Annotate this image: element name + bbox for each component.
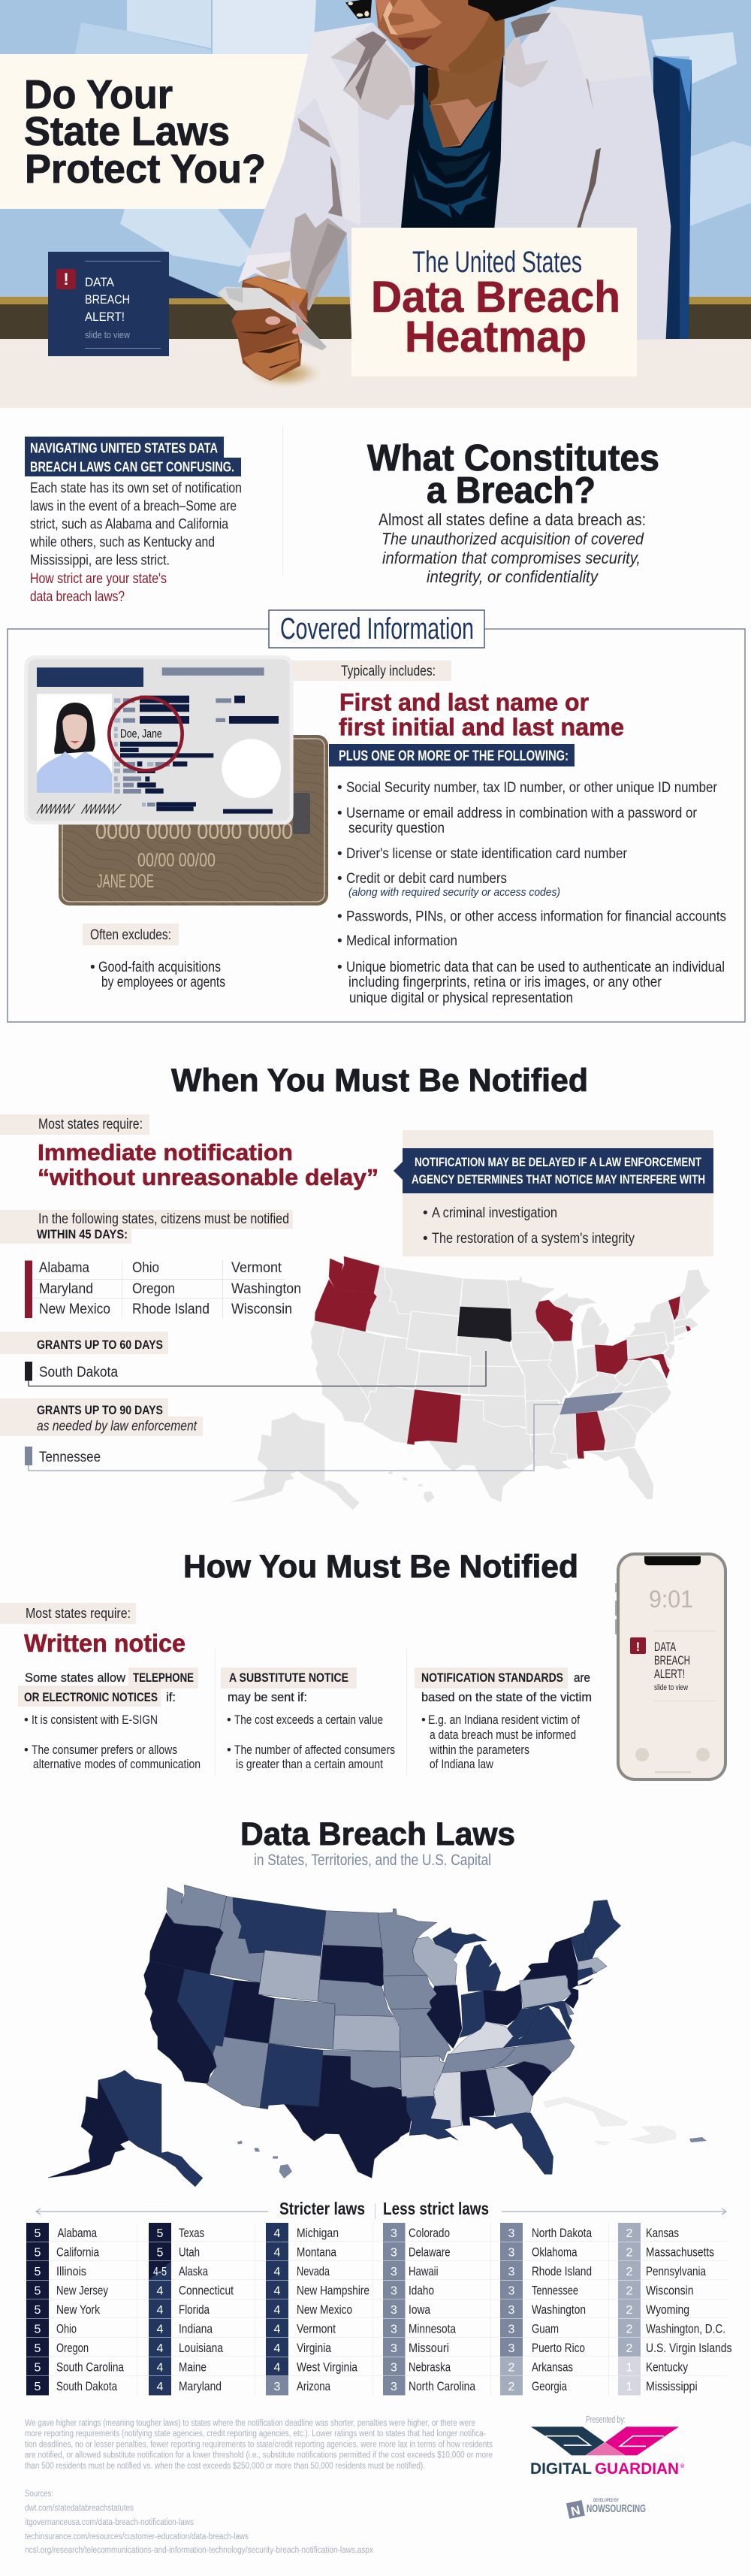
- list: covered items: Driver's license or state identification card number: [346, 846, 628, 862]
- tag: typically includes: [292, 661, 451, 681]
- column 2: 5: [157, 2227, 164, 2240]
- column 6: 2: [626, 2324, 633, 2336]
- alert card: !: [63, 270, 69, 289]
- column 1: [26, 2223, 125, 2396]
- callout: law enforcement delay: A criminal investigation: [432, 1205, 557, 1221]
- column 2: Texas: [179, 2227, 204, 2240]
- sources: Sources:: [25, 2490, 53, 2499]
- developer logo: Nowsourcing: N: [569, 2503, 581, 2519]
- column 3: 4: [274, 2304, 281, 2317]
- column 1: Alabama: [57, 2227, 98, 2240]
- column 4: Colorado: [409, 2227, 450, 2240]
- icon: phone with alert: 9:01: [649, 1586, 693, 1613]
- column: substitute notice: •: [227, 1743, 231, 1757]
- sources: dwt.com/statedatabreachstatutes: [25, 2504, 134, 2513]
- column 1: 5: [35, 2247, 41, 2259]
- label: plus one or more: [329, 744, 575, 766]
- heading: when you must be notified: When You Must Be Notified: [171, 1063, 588, 1099]
- key: Tennessee with connector: [25, 1404, 562, 1471]
- intro text block: Mississippi, are less strict.: [30, 553, 170, 568]
- column: notification standards: •: [421, 1713, 426, 1727]
- column 1: 5: [35, 2324, 41, 2336]
- tag: often excludes: [83, 924, 179, 945]
- title banner: Do Your: [24, 72, 173, 117]
- column: notification standards: E.g. an Indiana resident victim of: [428, 1713, 580, 1727]
- column 5: Puerto Rico: [532, 2342, 585, 2355]
- column 5: Washington: [532, 2303, 586, 2317]
- column 2: Florida: [179, 2303, 210, 2317]
- panel: covered information: [8, 610, 745, 1022]
- sources: ncsl.org/research/telecommunications-and-information-technology/security-breach-notification-laws.aspx: [25, 2546, 373, 2555]
- chair: [653, 56, 692, 339]
- column 5: 3: [508, 2324, 515, 2336]
- list: covered items: Credit or debit card numbers: [346, 871, 507, 887]
- column 4: 3: [391, 2227, 397, 2240]
- callout: law enforcement delay: •: [423, 1205, 428, 1221]
- heading: What Constitutes a Breach: [367, 438, 659, 511]
- list: covered items: •: [337, 871, 342, 887]
- column 5: 2: [508, 2381, 515, 2393]
- tag: within 45 days: WITHIN 45 DAYS:: [37, 1227, 128, 1241]
- column 2: 4: [157, 2361, 164, 2375]
- alert card: slide to view: [85, 329, 131, 340]
- state list: within 45 days: New Mexico: [39, 1302, 110, 1317]
- tag: most states require: [0, 1603, 136, 1624]
- column: telephone or electronic notices: Some states allow: [25, 1670, 126, 1685]
- column: telephone or electronic notices: •: [24, 1743, 29, 1757]
- state list: within 45 days: Oregon: [132, 1281, 175, 1297]
- heading: What Constitutes a Breach: What Constitutes: [367, 438, 659, 479]
- state list: within 45 days: [25, 1260, 301, 1318]
- credit card: 00/00 00/00: [137, 850, 216, 871]
- icon: phone with alert: DATA: [654, 1640, 676, 1654]
- list: covered items: •: [337, 846, 342, 862]
- credit card: [59, 735, 328, 906]
- heading: data breach laws: Data Breach Laws: [240, 1816, 515, 1852]
- column 4: 3: [391, 2361, 397, 2375]
- list: excluded items: [90, 960, 225, 990]
- list: excluded items: by employees or agents: [101, 975, 225, 990]
- column 2: Utah: [179, 2245, 200, 2259]
- column 2: 4: [157, 2381, 164, 2393]
- red heading: immediate notification: [38, 1139, 379, 1190]
- column 4: 3: [391, 2284, 397, 2298]
- intro text block: [25, 437, 242, 605]
- column 1: 5: [35, 2342, 41, 2355]
- column 5: 3: [508, 2266, 515, 2278]
- column 2: Indiana: [179, 2322, 213, 2336]
- column: substitute notice: •: [227, 1713, 231, 1727]
- column 5: Guam: [532, 2322, 559, 2336]
- column 6: 1: [626, 2361, 633, 2375]
- column 6: Pennsylvania: [646, 2265, 707, 2278]
- tag: most states require: Most states require:: [38, 1117, 143, 1132]
- column: notification standards: within the parameters: [429, 1743, 529, 1757]
- list: covered items: unique digital or physical representation: [349, 990, 573, 1006]
- intro text block: laws in the event of a breach–Some are: [30, 499, 237, 514]
- column 3: 3: [274, 2381, 281, 2393]
- icon: phone with alert: slide to view: [654, 1683, 688, 1692]
- list: covered items: •: [337, 806, 342, 821]
- column: notification standards: NOTIFICATION STANDARDS: [421, 1670, 563, 1685]
- column: substitute notice: A SUBSTITUTE NOTICE: [229, 1670, 348, 1685]
- state list: within 45 days: Washington: [231, 1281, 301, 1297]
- column 3: 4: [274, 2324, 281, 2336]
- column 4: 3: [391, 2247, 397, 2259]
- icon: phone with alert: ALERT!: [654, 1667, 685, 1681]
- column: notification standards: [415, 1667, 592, 1771]
- column 5: Tennessee: [532, 2284, 578, 2298]
- column 1: 5: [35, 2284, 41, 2298]
- column 4: Hawaii: [409, 2265, 439, 2278]
- column 1: Ohio: [56, 2322, 77, 2336]
- column 4: 3: [391, 2304, 397, 2317]
- red heading: first and last name: First and last name or: [339, 688, 589, 715]
- tag: grants up to 90 days: GRANTS UP TO 90 DAYS: [37, 1403, 163, 1417]
- breach definition: The unauthorized acquisition of covered: [382, 529, 644, 549]
- methodology note: than 500 residents must be notified vs. when the cost exceeds $250,000 or more than 50,000 residents must be notified).: [25, 2462, 425, 2471]
- tag: most states require: Most states require:: [26, 1606, 131, 1621]
- breach definition: integrity, or confidentiality: [427, 567, 599, 586]
- column 5: 3: [508, 2247, 515, 2259]
- state list: within 45 days: Vermont: [231, 1260, 282, 1276]
- column 5: Georgia: [532, 2380, 568, 2393]
- heading: how you must be notified: How You Must Be Notified: [183, 1549, 578, 1585]
- list: excluded items: •: [90, 960, 95, 975]
- state list: within 45 days: Wisconsin: [231, 1302, 292, 1317]
- tag: grants up to 60 days: [0, 1332, 168, 1354]
- intro text block: data breach laws?: [30, 589, 125, 605]
- column 2: 4: [157, 2304, 164, 2317]
- column 3: 4: [274, 2342, 281, 2355]
- credit card: 0000 0000 0000 0000: [95, 819, 293, 844]
- subtitle card: Data Breach: [371, 273, 620, 322]
- subtitle card: [351, 228, 637, 376]
- column 3: [266, 2223, 369, 2396]
- legend: stricter and less strict laws: [36, 2199, 726, 2219]
- states: [48, 1885, 621, 2187]
- column 6: Wisconsin: [646, 2284, 694, 2298]
- developer logo: Nowsourcing: [566, 2499, 646, 2519]
- title banner: Protect You?: [25, 147, 266, 192]
- legend: stricter and less strict laws: Stricter laws: [279, 2199, 365, 2218]
- state list: within 45 days: Ohio: [132, 1260, 159, 1276]
- column 3: 4: [274, 2227, 281, 2240]
- subheading: in States, Territories, and the U.S. Capital: [254, 1852, 491, 1869]
- red heading: immediate notification: “without unreasonable delay”: [38, 1164, 379, 1190]
- column 5: 3: [508, 2284, 515, 2298]
- column 2: [149, 2223, 234, 2396]
- tag: within 45 days: [0, 1210, 293, 1244]
- intro text block: while others, such as Kentucky and: [29, 535, 215, 550]
- icon: phone with alert: [615, 1553, 727, 1781]
- state list: within 45 days: Rhode Island: [132, 1302, 210, 1317]
- column 2: Maryland: [179, 2380, 222, 2393]
- developer logo: Nowsourcing: DEVELOPED BY: [593, 2499, 619, 2503]
- column 6: 2: [626, 2342, 633, 2355]
- column 2: 4-5: [153, 2266, 167, 2278]
- column 3: Nevada: [297, 2265, 330, 2278]
- column 3: Montana: [297, 2245, 337, 2259]
- column 4: Missouri: [409, 2342, 449, 2355]
- column 6: 2: [626, 2266, 633, 2278]
- tag: grants up to 90 days: as needed by law enforcement: [37, 1419, 198, 1434]
- column 5: Arkansas: [532, 2361, 573, 2375]
- list: covered items: security question: [348, 821, 445, 836]
- legend: stricter and less strict laws: Less strict laws: [383, 2199, 489, 2218]
- Puerto Rico: [689, 2137, 707, 2142]
- intro text block: BREACH LAWS CAN GET CONFUSING.: [30, 460, 234, 475]
- covered information title: [269, 610, 484, 648]
- sources: techinsurance.com/resources/customer-education/data-breach-laws: [25, 2532, 249, 2541]
- column: notification standards: are: [574, 1670, 590, 1685]
- intro text block: NAVIGATING UNITED STATES DATA: [30, 440, 218, 455]
- list: covered items: •: [337, 780, 342, 796]
- column 2: 4: [157, 2284, 164, 2298]
- column 1: California: [56, 2245, 100, 2259]
- column 3: 4: [274, 2284, 281, 2298]
- column 5: 3: [508, 2304, 515, 2317]
- alert card: [48, 252, 222, 356]
- column 4: 3: [391, 2381, 397, 2393]
- tag: within 45 days: In the following states, citizens must be notified: [38, 1211, 289, 1227]
- column 6: 2: [626, 2284, 633, 2298]
- methodology note: tion deadlines, no or lesser penalties, fewer reporting requirements to state/credit reporting agencies, were more lax in terms of how residents: [25, 2441, 493, 2450]
- subtitle card: Heatmap: [405, 313, 587, 361]
- faint caribbean hatching: [543, 2097, 676, 2145]
- list: covered items: (along with required security or access codes): [348, 886, 560, 899]
- subtitle card: The United States: [412, 246, 582, 279]
- portrait: [37, 703, 112, 793]
- title banner: [0, 54, 315, 209]
- column 1: South Dakota: [56, 2380, 118, 2393]
- column 3: West Virginia: [297, 2361, 358, 2375]
- intro text block: strict, such as Alabama and California: [30, 517, 228, 532]
- column 2: Louisiana: [179, 2342, 224, 2355]
- column 3: Arizona: [297, 2380, 331, 2393]
- breach definition: Almost all states define a data breach as:: [379, 510, 646, 529]
- map: data breach law strictness: [48, 1885, 707, 2187]
- column 2: 4: [157, 2324, 164, 2336]
- column 6: Kansas: [646, 2227, 679, 2240]
- list: covered items: Username or email address in combination with a password or: [346, 806, 698, 821]
- ID card: Doe, Jane: [120, 728, 162, 741]
- column 3: New Hampshire: [297, 2284, 369, 2298]
- tag: typically includes: Typically includes:: [341, 664, 436, 679]
- column 6: [618, 2223, 731, 2396]
- column 3: Vermont: [297, 2322, 336, 2336]
- list: excluded items: Good-faith acquisitions: [98, 960, 221, 975]
- column 1: 5: [35, 2266, 41, 2278]
- column 1: Oregon: [56, 2342, 89, 2355]
- table: state ratings: [26, 2223, 731, 2396]
- column 4: 3: [391, 2266, 397, 2278]
- column 6: 2: [626, 2227, 633, 2240]
- column: telephone or electronic notices: •: [24, 1713, 29, 1727]
- column 2: Maine: [179, 2361, 207, 2375]
- column: substitute notice: is greater than a certain amount: [236, 1758, 383, 1771]
- column 5: [500, 2223, 593, 2396]
- list: covered items: •: [337, 960, 342, 975]
- presenter logo: Digital Guardian: [530, 2414, 685, 2478]
- hero background: sky with state shapes: [0, 0, 751, 408]
- breach definition: [379, 510, 646, 586]
- red heading: first and last name: first initial and last name: [339, 714, 624, 741]
- column 6: U.S. Virgin Islands: [646, 2342, 731, 2355]
- callout: law enforcement delay: •: [423, 1231, 428, 1247]
- column 3: 4: [274, 2266, 281, 2278]
- column 2: 4: [157, 2342, 164, 2355]
- key: Tennessee with connector: Tennessee: [39, 1450, 101, 1465]
- column 1: 5: [35, 2227, 41, 2240]
- column 6: 2: [626, 2304, 633, 2317]
- illustration: woman with phone: [218, 0, 671, 389]
- column 5: 3: [508, 2227, 515, 2240]
- credit card: JANE DOE: [97, 871, 154, 892]
- alert card: DATA: [85, 275, 115, 289]
- covered information title: Covered Information: [280, 612, 474, 646]
- list: covered items: •: [337, 909, 342, 924]
- methodology note: more reporting requirements (notifying state agencies, credit reporting agencies, etc.). Lower ratings went to states that had longer notifica-: [25, 2429, 486, 2438]
- column: notification standards: a data breach must be informed: [430, 1728, 576, 1742]
- column 3: New Mexico: [297, 2303, 352, 2317]
- label: plus one or more: PLUS ONE OR MORE OF THE FOLLOWING:: [339, 748, 569, 764]
- alert card: BREACH: [85, 292, 130, 307]
- column 4: [383, 2223, 476, 2396]
- list: covered items: Social Security number, tax ID number, or other unique ID number: [346, 780, 718, 796]
- presenter logo: Digital Guardian: ®: [680, 2463, 685, 2469]
- column 4: Nebraska: [409, 2361, 451, 2375]
- hero panel: [0, 0, 751, 408]
- column: telephone or electronic notices: alternative modes of communication: [33, 1758, 201, 1771]
- column 5: Rhode Island: [532, 2265, 592, 2278]
- column: telephone or electronic notices: [18, 1667, 201, 1771]
- column 4: 3: [391, 2324, 397, 2336]
- column 5: North Dakota: [532, 2227, 593, 2240]
- column 5: Oklahoma: [532, 2245, 578, 2259]
- column 1: New Jersey: [56, 2284, 109, 2298]
- column 4: 3: [391, 2342, 397, 2355]
- column 4: North Carolina: [409, 2380, 476, 2393]
- state list: within 45 days: Alabama: [39, 1260, 89, 1276]
- developer logo: Nowsourcing: NOWSOURCING: [587, 2502, 646, 2515]
- column: substitute notice: The cost exceeds a certain value: [234, 1713, 383, 1727]
- column: telephone or electronic notices: if:: [166, 1690, 176, 1704]
- list: covered items: including fingerprints, retina or iris images, or any other: [348, 975, 662, 990]
- column 4: Iowa: [409, 2303, 431, 2317]
- sources: [25, 2490, 373, 2555]
- column 1: Illinois: [56, 2265, 86, 2278]
- column: substitute notice: The number of affected consumers: [234, 1743, 395, 1757]
- ID card: [24, 655, 294, 824]
- column: substitute notice: may be sent if:: [228, 1690, 307, 1704]
- icon: phone with alert: BREACH: [654, 1653, 690, 1667]
- column 1: 5: [35, 2304, 41, 2317]
- callout: law enforcement delay: [394, 1130, 713, 1256]
- column 6: Wyoming: [646, 2303, 689, 2317]
- callout: law enforcement delay: The restoration of a system's integrity: [432, 1231, 635, 1247]
- column 6: 1: [626, 2381, 633, 2393]
- red heading: immediate notification: Immediate notification: [38, 1139, 293, 1166]
- red heading: written notice: Written notice: [24, 1629, 185, 1657]
- column 3: Michigan: [297, 2227, 339, 2240]
- column 3: 4: [274, 2361, 281, 2375]
- column: substitute notice: [221, 1667, 395, 1771]
- alert card: ALERT!: [85, 310, 125, 324]
- sources: itgovernanceusa.com/data-breach-notification-laws: [25, 2518, 194, 2527]
- icon: phone with alert: !: [636, 1640, 640, 1654]
- column 6: 2: [626, 2247, 633, 2259]
- column: telephone or electronic notices: It is consistent with E-SIGN: [32, 1713, 158, 1727]
- title banner: State Laws: [24, 109, 230, 154]
- column 4: Delaware: [409, 2245, 451, 2259]
- key: South Dakota with connector: South Dakota: [39, 1365, 118, 1380]
- column 2: Alaska: [179, 2265, 209, 2278]
- list: covered items: Medical information: [346, 933, 457, 949]
- column 1: 5: [35, 2361, 41, 2375]
- column 3: Virginia: [297, 2342, 332, 2355]
- column 6: Mississippi: [646, 2380, 698, 2393]
- column 4: Minnesota: [409, 2322, 457, 2336]
- column 1: South Carolina: [56, 2361, 125, 2375]
- intro text block: How strict are your state's: [30, 571, 167, 587]
- column: notification standards: based on the state of the victim: [421, 1690, 592, 1704]
- column 6: Washington, D.C.: [646, 2322, 725, 2336]
- column 4: Idaho: [409, 2284, 434, 2298]
- methodology note: are notified, or allowed substitute notification for a lower threshold (i.e., substitute notifications permitted if the cost exceeds $10,000 or more: [25, 2451, 493, 2460]
- breach definition: information that compromises security,: [382, 549, 641, 567]
- key: South Dakota with connector: [25, 1351, 486, 1386]
- tag: grants up to 90 days: [0, 1398, 203, 1436]
- column 5: 3: [508, 2342, 515, 2355]
- column 2: 5: [157, 2247, 164, 2259]
- column 3: 4: [274, 2247, 281, 2259]
- column 6: Kentucky: [646, 2361, 689, 2375]
- column: notification standards: of Indiana law: [430, 1758, 493, 1771]
- column: telephone or electronic notices: The consumer prefers or allows: [32, 1743, 177, 1757]
- heading: What Constitutes a Breach: a Breach?: [427, 470, 596, 511]
- column 1: 5: [35, 2381, 41, 2393]
- methodology note: [25, 2419, 493, 2471]
- column 5: 2: [508, 2361, 515, 2375]
- column 6: Massachusetts: [646, 2245, 714, 2259]
- presenter logo: Digital Guardian: GUARDIAN: [595, 2460, 679, 2478]
- methodology note: We gave higher ratings (meaning tougher laws) to states where the notification deadline was shorter, penalties were higher, or there were: [25, 2419, 475, 2428]
- column: telephone or electronic notices: OR ELECTRONIC NOTICES: [24, 1690, 158, 1704]
- column: telephone or electronic notices: TELEPHONE: [133, 1670, 194, 1685]
- list: covered items: [337, 780, 726, 1006]
- map: notification deadlines: [230, 1256, 710, 1510]
- intro text block: Each state has its own set of notification: [30, 481, 242, 496]
- presenter logo: Digital Guardian: Presented by:: [586, 2414, 626, 2425]
- column 1: New York: [56, 2303, 101, 2317]
- list: covered items: •: [337, 933, 342, 949]
- tag: often excludes: Often excludes:: [90, 927, 171, 943]
- column 2: Connecticut: [179, 2284, 234, 2298]
- red heading: first and last name: [339, 688, 624, 741]
- tag: grants up to 60 days: GRANTS UP TO 60 DAYS: [37, 1338, 163, 1352]
- state list: within 45 days: Maryland: [39, 1281, 93, 1297]
- tag: most states require: [0, 1114, 149, 1135]
- presenter logo: Digital Guardian: DIGITAL: [530, 2460, 592, 2478]
